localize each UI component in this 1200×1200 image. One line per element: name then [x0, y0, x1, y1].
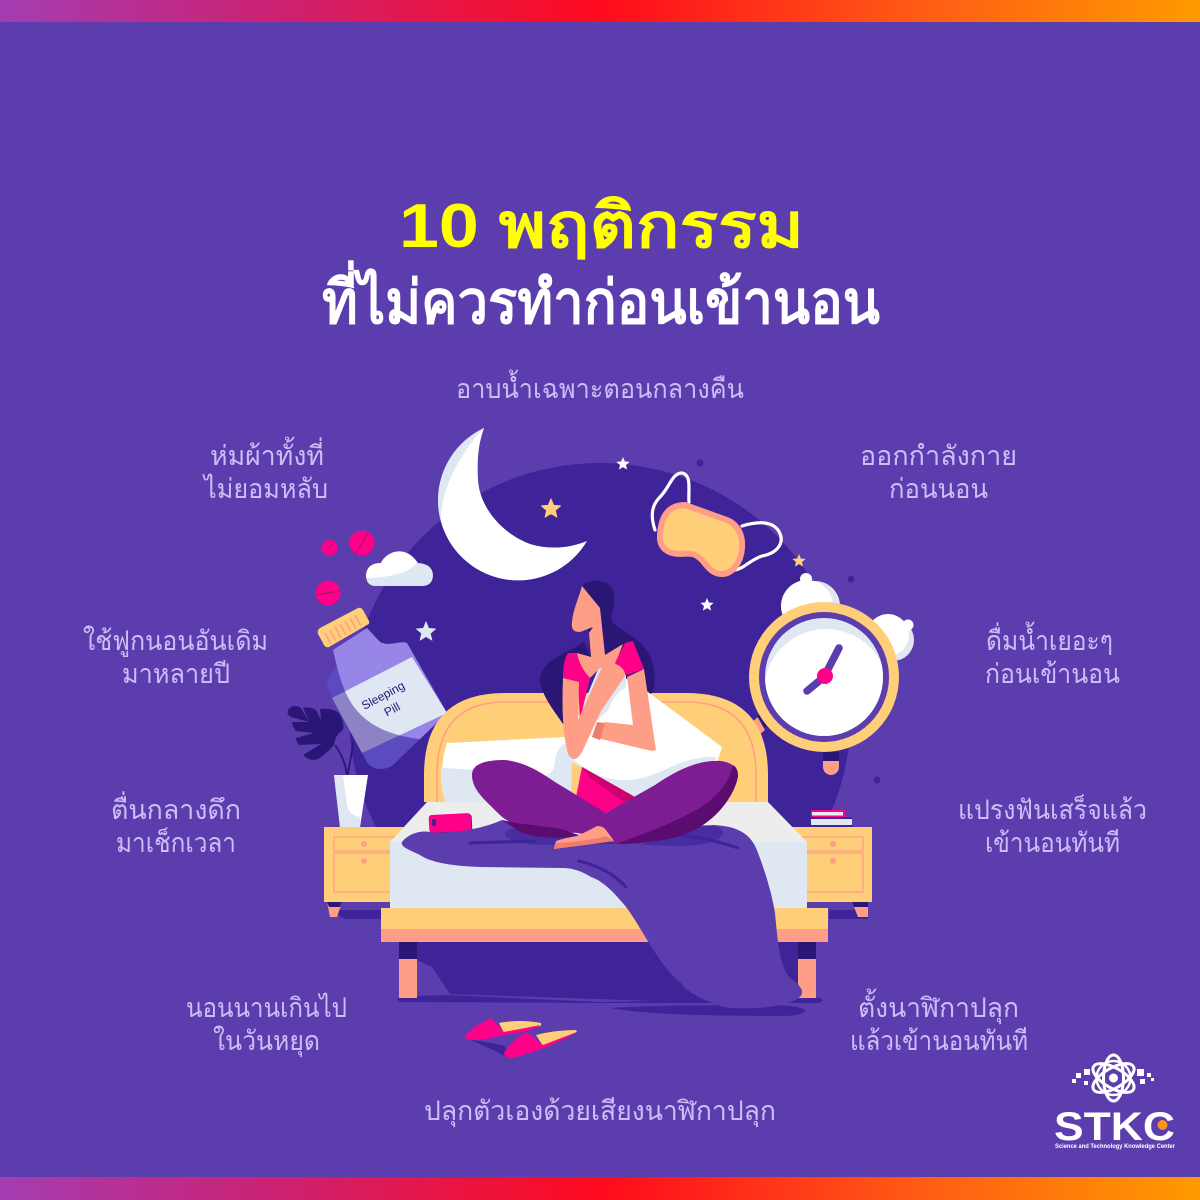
phone: [429, 813, 472, 835]
foot: [554, 826, 614, 849]
label: old mattress: มาหลายปี: [122, 659, 230, 689]
logo tagline: Science and Technology Knowledge Center: [1055, 1144, 1176, 1150]
bottle label text: Sleeping: [359, 678, 407, 713]
hair: [540, 581, 655, 724]
label: brushing teeth: เข้านอนทันที: [985, 828, 1120, 858]
label: drinking water: [985, 621, 1120, 689]
label: exercise: ออกกำลังกาย: [860, 441, 1017, 471]
label: oversleeping: [186, 993, 347, 1058]
legs: [472, 760, 738, 849]
label: checking time: [111, 791, 241, 858]
bed: [381, 693, 828, 998]
label: setting alarm: แล้วเข้านอนทันที: [850, 1026, 1028, 1056]
label: top: อาบน้ำเฉพาะตอนกลางคืน: [456, 369, 744, 404]
bottom gradient bar: [0, 1177, 1200, 1200]
top gradient bar: [0, 0, 1200, 22]
label: setting alarm: ตั้งนาฬิกาปลุก: [858, 988, 1019, 1025]
label: setting alarm: [850, 988, 1028, 1056]
icon: pills: [316, 530, 374, 606]
label: old mattress: [83, 625, 268, 689]
label: exercise: ก่อนนอน: [889, 474, 988, 504]
logo emblem: [1089, 1055, 1138, 1101]
icon: crescent moon: [438, 428, 587, 580]
clock bells: [781, 573, 914, 661]
icon: cloud: [366, 551, 433, 586]
icon: vase: [334, 775, 368, 827]
title line 2: ที่ไม่ควรทำก่อนเข้านอน: [322, 260, 880, 336]
woman: [540, 581, 722, 815]
headboard: [424, 693, 768, 802]
logo squares: [1072, 1069, 1154, 1085]
arms: [562, 664, 656, 759]
label: checking time: มาเช็กเวลา: [116, 825, 236, 858]
label: drinking water: ก่อนเข้านอน: [985, 659, 1120, 689]
icon: slippers: [465, 1018, 577, 1058]
bottle label text: Pill: [382, 700, 402, 719]
label: exercise: [860, 441, 1017, 504]
label: brushing teeth: แปรงฟันเสร็จแล้ว: [958, 792, 1147, 825]
label: blanket: [202, 436, 328, 504]
title: [322, 192, 880, 336]
title line 1: 10 พฤติกรรม: [399, 192, 804, 261]
label: checking time: ตื่นกลางดึก: [111, 791, 241, 825]
shirt upper: [563, 641, 644, 720]
back pillow: [441, 737, 576, 802]
label: oversleeping: ในวันหยุด: [213, 1025, 320, 1058]
icon: books: [811, 810, 853, 827]
label: brushing teeth: [958, 792, 1147, 858]
dark area under bed: [417, 942, 798, 1003]
clock feet: [752, 712, 839, 775]
blanket folds: [470, 835, 738, 887]
stars: [416, 457, 806, 641]
label: old mattress: ใช้ฟูกนอนอันเดิม: [83, 625, 268, 657]
small dots: [696, 460, 880, 784]
night sky circle: [349, 463, 851, 965]
label: bottom: ปลุกตัวเองด้วยเสียงนาฬิกาปลุก: [424, 1096, 776, 1128]
bed legs: [399, 942, 816, 998]
blanket: [402, 820, 802, 1008]
label: blanket: ห่มผ้าทั้งที่: [210, 436, 324, 471]
icon: sleeping pill bottle: [318, 608, 447, 769]
icon: sleep mask: [652, 473, 781, 574]
clock hands: [807, 648, 839, 691]
icon: monstera plant: [287, 706, 353, 775]
blanket floor shadow: [611, 1005, 805, 1016]
bed frame: [381, 908, 828, 942]
icon: alarm clock: [749, 573, 914, 775]
logo: [1054, 1055, 1176, 1150]
mattress: [390, 802, 807, 908]
label: oversleeping: นอนนานเกินไป: [186, 993, 347, 1023]
skin neck and face: [572, 586, 623, 678]
floor shadow: [397, 995, 823, 1003]
shirt lower: [571, 763, 635, 813]
logo wordmark: STKC: [1054, 1105, 1175, 1149]
label: blanket: ไม่ยอมหลับ: [202, 474, 328, 504]
label: drinking water: ดื่มน้ำเยอะๆ: [986, 621, 1113, 656]
blanket shadows: [505, 825, 723, 846]
left nightstand: [324, 827, 404, 919]
bottle cap: [318, 608, 369, 647]
right nightstand: [790, 827, 872, 919]
held pillow: [572, 662, 722, 815]
